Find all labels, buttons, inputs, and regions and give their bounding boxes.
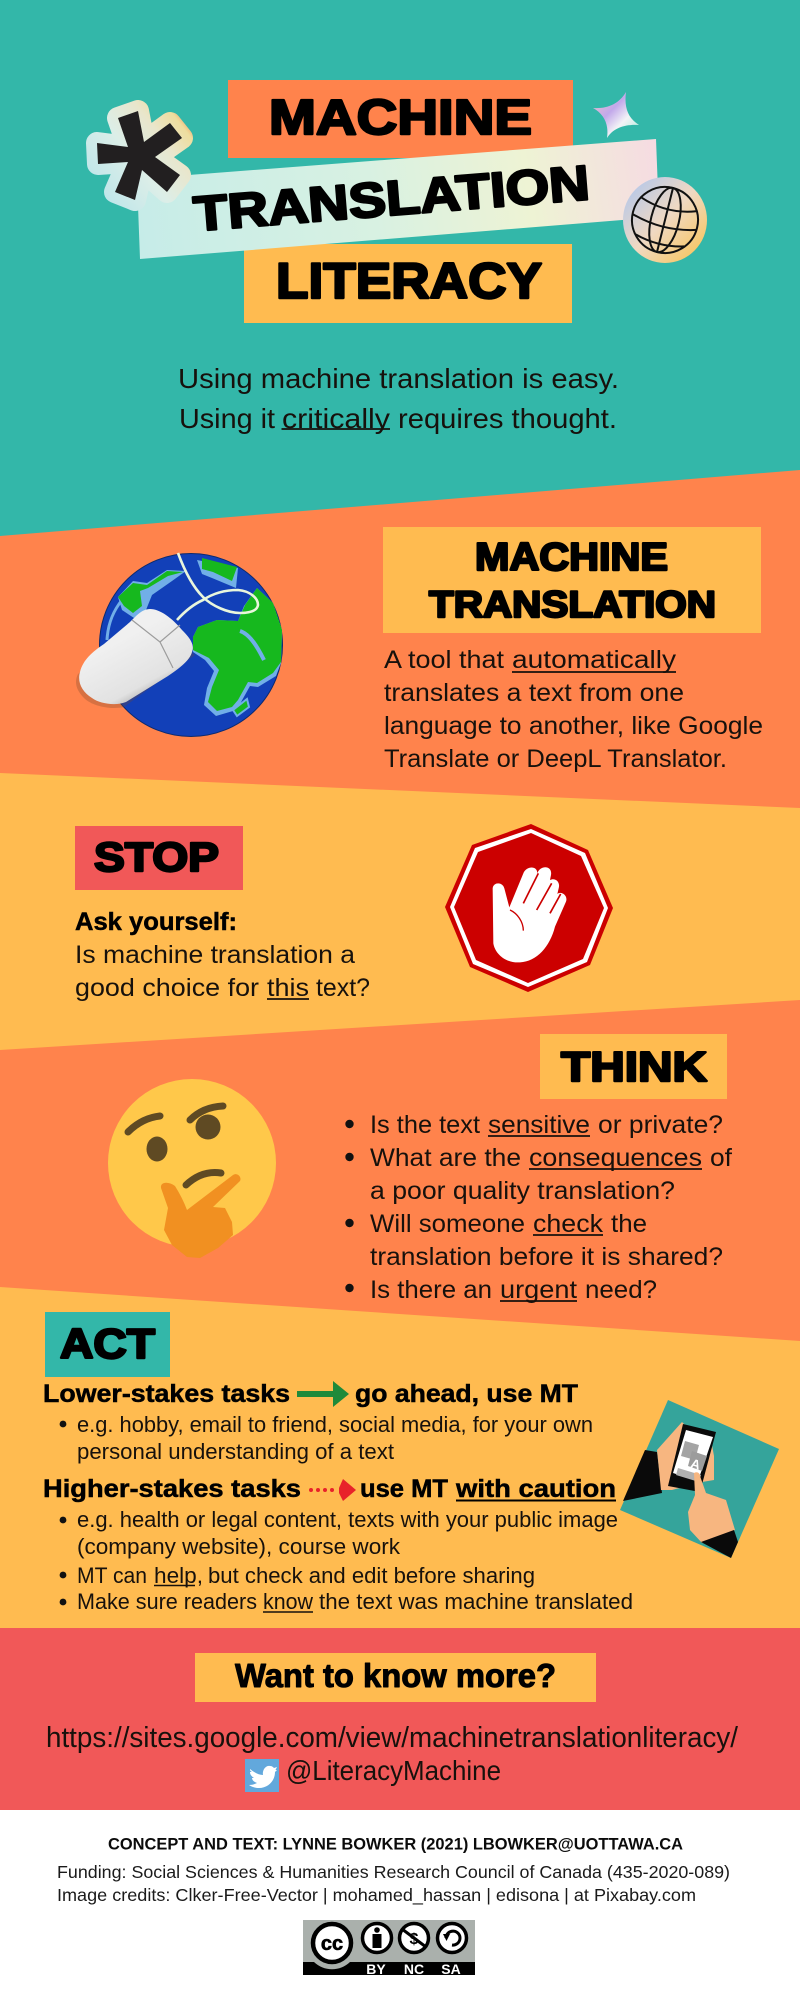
stop question text (75, 908, 370, 1002)
heading box: machine translation (383, 527, 761, 633)
bullet: high-stakes examples: e.g. health or legal content, texts with your public image (77, 1507, 618, 1532)
title box: machine (228, 80, 573, 158)
heading box: act: ACT (60, 1320, 155, 1367)
panel background: orange think band (0, 1000, 800, 1350)
icon: hands using a translation app on a phone: A (689, 1456, 703, 1473)
tagline: critically (282, 403, 390, 434)
panel: act (43, 1312, 779, 1614)
heading box: stop (75, 826, 243, 890)
stop question text: text? (316, 974, 370, 1002)
background: teal header (0, 0, 800, 560)
icon: sparkle (593, 92, 639, 138)
panel background: red more information band (0, 1628, 800, 1810)
bullet: check and edit (60, 1563, 535, 1588)
bullet: check and edit: MT can (77, 1563, 147, 1588)
lower-stakes heading with green arrow (43, 1380, 578, 1408)
definition text: Translate or DeepL Translator. (384, 745, 727, 773)
twitter handle: @LiteracyMachine (286, 1755, 501, 1786)
bullet: urgent (345, 1276, 657, 1304)
lower-stakes examples: personal understanding of a text (77, 1439, 394, 1464)
definition text: translates a text from one (384, 679, 684, 707)
heading box: machine translation: MACHINE (475, 536, 668, 579)
definition text (384, 646, 763, 773)
bullet: sensitive: sensitive (488, 1111, 590, 1139)
creative commons badge: BY (366, 1961, 386, 1977)
lower-stakes examples (60, 1412, 593, 1464)
heading box: act (45, 1312, 170, 1377)
stop question text: this (267, 974, 309, 1002)
stop question text: good choice for (75, 974, 259, 1002)
author line: CONCEPT AND TEXT: LYNNE BOWKER (2021) LBOWKER@UOTTAWA.CA (108, 1834, 683, 1854)
bullet: consequences: of (710, 1144, 732, 1172)
icon: twitter bird (245, 1759, 279, 1792)
bullet: check and edit: help, (154, 1563, 203, 1588)
panel: stop (75, 824, 613, 1002)
bullet: high-stakes examples (60, 1507, 618, 1559)
heading box: want to know more: Want to know more? (235, 1657, 556, 1694)
title box: machine: MACHINE (269, 91, 532, 145)
bullet: consequences: consequences (529, 1144, 702, 1172)
title band: translation: TRANSLATION (192, 156, 592, 242)
title (97, 80, 707, 323)
image credits line: Image credits: Clker-Free-Vector | mohamed_hassan | edisona | at Pixabay.com (57, 1885, 696, 1906)
tagline: Using it (179, 403, 275, 434)
panel: want to know more (46, 1653, 739, 1792)
definition text: A tool that (384, 646, 504, 674)
bullet: tell readers: Make sure readers (77, 1589, 257, 1614)
lower-stakes heading with green arrow: go ahead, use MT (355, 1380, 578, 1408)
bullet: check (345, 1210, 723, 1271)
bullet: check and edit: but check and edit before sharing (208, 1563, 535, 1588)
heading box: want to know more (195, 1653, 596, 1702)
bullet: check: Will someone (370, 1210, 525, 1238)
stop question text: Ask yourself: (75, 908, 237, 936)
funding line: Funding: Social Sciences & Humanities Research Council of Canada (435-2020-089) (57, 1862, 730, 1882)
icon: wireframe globe (623, 177, 707, 263)
heading box: stop: STOP (94, 834, 219, 880)
computer mouse (76, 609, 195, 708)
icon: stop sign with hand (445, 824, 613, 992)
bullet: urgent: Is there an (370, 1276, 492, 1304)
tagline (178, 363, 619, 434)
panel background: yellow stop band (0, 773, 800, 1060)
bullet: tell readers (60, 1589, 633, 1614)
panel background: orange definition band (0, 470, 800, 820)
bullet: tell readers: the text was machine translated (319, 1589, 633, 1614)
bullet: check: check (533, 1210, 604, 1238)
bullet: urgent: urgent (500, 1276, 577, 1304)
panel: think (108, 1034, 732, 1304)
project website link: https://sites.google.com/view/machinetranslationliteracy/ (46, 1722, 739, 1754)
tagline: requires thought. (398, 403, 617, 434)
icon: thinking face emoji (108, 1079, 276, 1258)
bulleted questions (345, 1111, 732, 1304)
definition text: automatically (512, 646, 677, 674)
higher-stakes heading with red dotted arrow (43, 1475, 616, 1503)
higher-stakes heading with red dotted arrow: use MT (360, 1475, 448, 1503)
bullet: urgent: need? (585, 1276, 657, 1304)
bullet: consequences: a poor quality translation? (370, 1177, 675, 1205)
tagline: Using machine translation is easy. (178, 363, 619, 394)
creative commons badge: cc (321, 1933, 343, 1955)
creative commons badge: $ (410, 1931, 419, 1948)
bullet: check: translation before it is shared? (370, 1243, 723, 1271)
panel: machine translation definition (76, 527, 763, 773)
panel: credits (57, 1834, 730, 1977)
higher-stakes heading with red dotted arrow: with caution (455, 1475, 616, 1503)
bullet: consequences (345, 1144, 732, 1205)
creative commons badge: SA (441, 1961, 461, 1977)
panel background: white credits (0, 1810, 800, 2000)
panel background: yellow act band (0, 1287, 800, 1640)
definition text: language to another, like Google (384, 712, 763, 740)
icon: holographic asterisk (97, 111, 182, 200)
title band: translation (137, 139, 659, 259)
creative commons badge (303, 1920, 475, 1977)
bullet: check: the (611, 1210, 647, 1238)
bullet: sensitive: Is the text (370, 1111, 480, 1139)
heading box: think: THINK (561, 1043, 707, 1090)
icon: globe with computer mouse (76, 553, 282, 736)
title box: literacy (244, 244, 572, 323)
stop question text: Is machine translation a (75, 941, 355, 969)
heading box: machine translation: TRANSLATION (429, 584, 716, 625)
bullet: sensitive (345, 1111, 723, 1139)
bullet: tell readers: know (263, 1589, 313, 1614)
creative commons badge: NC (404, 1961, 424, 1977)
title box: literacy: LITERACY (276, 253, 542, 309)
higher-stakes heading with red dotted arrow: Higher-stakes tasks (43, 1475, 301, 1503)
heading box: think (540, 1034, 727, 1099)
bullet: high-stakes examples: (company website), course work (77, 1534, 401, 1559)
icon: hands using a translation app on a phone (620, 1400, 779, 1558)
higher-stakes advice (60, 1507, 633, 1614)
lower-stakes examples: e.g. hobby, email to friend, social media, for your own (77, 1412, 593, 1437)
lower-stakes heading with green arrow: Lower-stakes tasks (43, 1380, 290, 1408)
bullet: consequences: What are the (370, 1144, 521, 1172)
bullet: sensitive: or private? (598, 1111, 723, 1139)
